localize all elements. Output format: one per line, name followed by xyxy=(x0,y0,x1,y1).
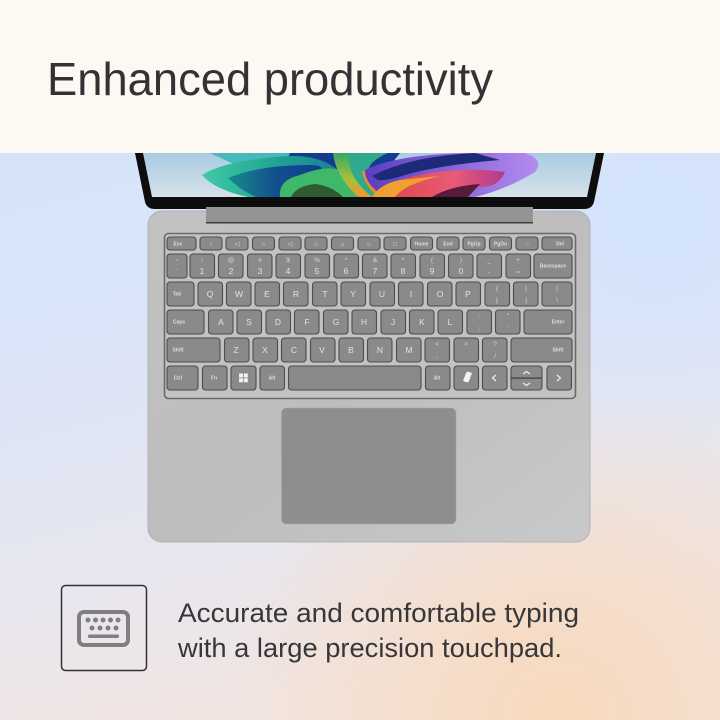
callout text xyxy=(177,598,579,663)
bottom key row: Alt xyxy=(434,376,441,382)
hinge xyxy=(206,207,533,224)
bottom key row: Alt xyxy=(269,376,276,382)
QWERTY key row: O xyxy=(437,289,444,299)
function key row: ☼ xyxy=(261,241,266,248)
touchpad xyxy=(282,408,456,524)
function key row: Esc xyxy=(174,242,183,248)
number key row: ( xyxy=(431,257,434,264)
shift key row: > xyxy=(464,341,468,348)
shift key row: . xyxy=(465,353,467,360)
number key row: % xyxy=(314,257,320,264)
number key row: 1 xyxy=(200,266,205,276)
number key row: ` xyxy=(176,269,178,276)
number key row: $ xyxy=(286,257,290,264)
number key row: 0 xyxy=(459,266,464,276)
number key row: 9 xyxy=(430,266,435,276)
number key row: - xyxy=(488,269,490,276)
icon: up and down arrows xyxy=(523,372,530,386)
icon: left arrow xyxy=(492,375,496,381)
home key row: : xyxy=(478,313,480,320)
laptop screen xyxy=(135,153,604,209)
number key row: 4 xyxy=(286,266,291,276)
number key row: _ xyxy=(486,257,491,264)
callout text: Accurate and comfortable typing xyxy=(178,598,579,628)
QWERTY key row: \ xyxy=(556,297,558,304)
number key row: 2 xyxy=(229,266,234,276)
keyboard xyxy=(164,234,576,398)
number key row: 3 xyxy=(258,266,263,276)
home key row: Enter xyxy=(552,320,564,326)
home key row: L xyxy=(448,317,453,327)
laptop xyxy=(135,153,604,542)
title band xyxy=(0,0,720,153)
icon: keyboard xyxy=(79,612,128,645)
bottom key row xyxy=(167,366,572,390)
shift key row: N xyxy=(377,345,383,355)
function key row: End xyxy=(443,242,453,248)
home key row: Caps xyxy=(173,320,185,326)
number key row: ! xyxy=(201,257,203,264)
home key row: G xyxy=(333,317,339,327)
shift key row: , xyxy=(436,353,438,360)
shift key row: V xyxy=(319,345,325,355)
shift key row: Shift xyxy=(552,348,564,354)
number key row: ) xyxy=(460,257,462,264)
laptop deck xyxy=(148,207,590,542)
icon box xyxy=(62,586,146,670)
function key row: ⌂ xyxy=(314,241,318,248)
home key row: S xyxy=(246,317,252,327)
wallpaper bloom xyxy=(202,153,538,197)
feature callout xyxy=(62,586,579,670)
function key row xyxy=(167,237,572,250)
number key row: & xyxy=(373,257,378,264)
icon: Windows logo xyxy=(239,374,248,382)
QWERTY key row: Y xyxy=(350,289,356,299)
number key row: ^ xyxy=(344,257,348,264)
number key row: Backspace xyxy=(540,264,566,270)
shift key row: Z xyxy=(233,345,239,355)
icon: right arrow xyxy=(557,375,560,381)
home key row: A xyxy=(218,317,224,327)
QWERTY key row: E xyxy=(264,289,270,299)
home key row: J xyxy=(391,317,395,327)
home key row: ; xyxy=(478,325,480,332)
QWERTY key row: { xyxy=(496,285,499,292)
function key row: ☼ xyxy=(340,241,345,248)
home key row: ' xyxy=(507,325,509,332)
shift key row xyxy=(167,338,572,362)
shift key row: ? xyxy=(493,341,497,348)
function key row: PgUp xyxy=(467,242,481,248)
number key row: = xyxy=(516,269,520,276)
number key row: + xyxy=(516,257,520,264)
QWERTY key row: | xyxy=(556,285,558,292)
shift key row: C xyxy=(291,345,297,355)
home key row: D xyxy=(275,317,281,327)
shift key row: / xyxy=(494,353,496,360)
QWERTY key row: Q xyxy=(207,289,214,299)
number key row: 8 xyxy=(401,266,406,276)
function key row: ☼ xyxy=(366,241,372,248)
function key row: ◁ xyxy=(234,241,240,248)
QWERTY key row: R xyxy=(293,289,299,299)
QWERTY key row: Tab xyxy=(173,292,181,298)
icon: Copilot logo xyxy=(463,372,472,382)
function key row: ◁ xyxy=(288,241,294,248)
function key row: ○ xyxy=(525,241,529,248)
QWERTY key row: [ xyxy=(496,297,498,304)
number key row: 5 xyxy=(315,266,320,276)
QWERTY key row: P xyxy=(465,289,471,299)
number key row: 7 xyxy=(373,266,378,276)
QWERTY key row xyxy=(167,282,572,306)
home key row xyxy=(167,310,572,334)
bottom key row: Fn xyxy=(211,376,217,382)
number key row: 6 xyxy=(344,266,349,276)
QWERTY key row: ] xyxy=(525,297,527,304)
QWERTY key row: U xyxy=(379,289,385,299)
callout text: with a large precision touchpad. xyxy=(177,633,562,663)
keyboard well xyxy=(164,234,576,398)
QWERTY key row: W xyxy=(235,289,243,299)
shift key row: X xyxy=(262,345,268,355)
title: Enhanced productivity xyxy=(47,53,493,105)
number key row: @ xyxy=(228,257,235,264)
shift key row: Shift xyxy=(172,348,184,354)
function key row: Home xyxy=(415,242,429,248)
QWERTY key row: } xyxy=(525,285,528,292)
number key row: # xyxy=(258,257,262,264)
home key row: H xyxy=(361,317,367,327)
shift key row: M xyxy=(405,345,413,355)
shift key row: B xyxy=(348,345,354,355)
number key row: ~ xyxy=(175,257,179,264)
function key row: Del xyxy=(556,242,565,248)
bottom key row: Ctrl xyxy=(174,376,183,382)
number key row xyxy=(167,254,572,278)
number key row: * xyxy=(402,257,405,264)
function key row: □ xyxy=(393,241,397,248)
home key row: F xyxy=(304,317,310,327)
home key row: " xyxy=(507,313,510,320)
QWERTY key row: T xyxy=(322,289,328,299)
home key row: K xyxy=(419,317,425,327)
function key row: ♪ xyxy=(209,241,213,248)
shift key row: < xyxy=(435,341,439,348)
QWERTY key row: I xyxy=(410,289,412,299)
function key row: PgDn xyxy=(494,242,507,248)
